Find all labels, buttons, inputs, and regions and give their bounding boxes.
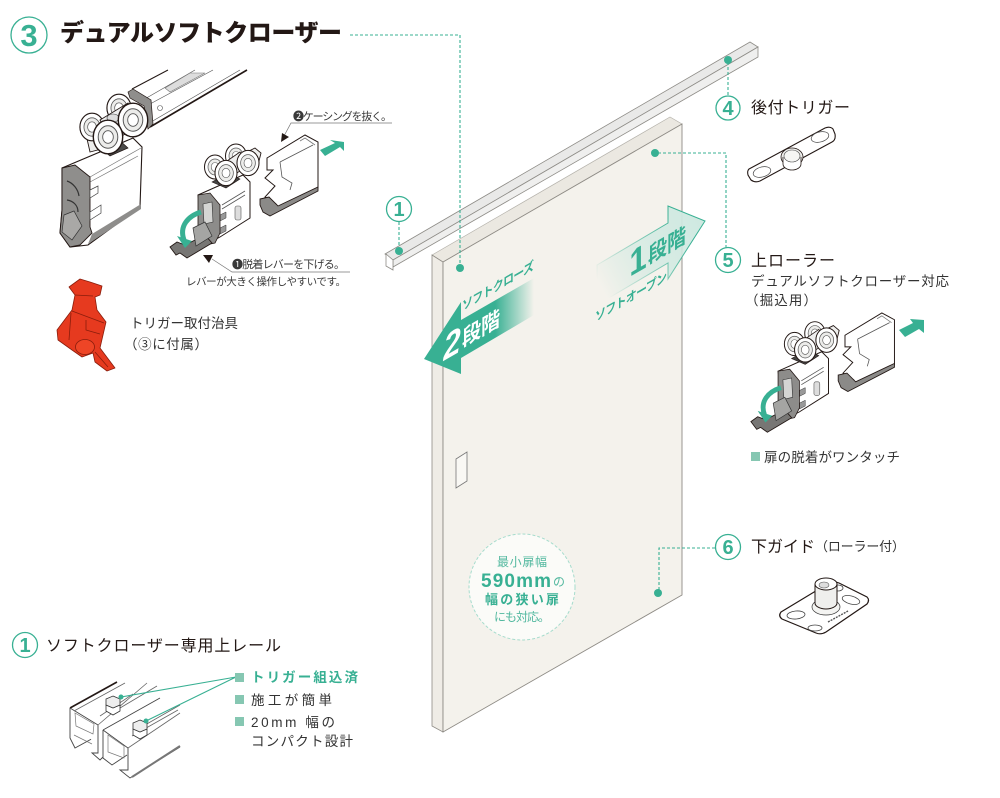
arrow: soft open 1 step: 段階 <box>648 222 686 269</box>
annotation: step 1 lower lever <box>186 255 350 288</box>
label: trigger jig <box>124 316 238 352</box>
label: trigger jig: トリガー取付治具 <box>130 316 238 331</box>
badge 6 with leader: 6 <box>722 537 734 559</box>
annotation: step 1 lower lever: レバーが大きく操作しやすいです。 <box>186 275 346 288</box>
feature list <box>235 669 358 749</box>
annotation: step 2 remove casing: ❷ケーシングを抜く。 <box>293 109 392 123</box>
callout: minimum door width: 最小扉幅 <box>497 554 547 569</box>
heading: upper roller <box>745 252 950 308</box>
label: trigger jig: （③に付属） <box>124 337 208 352</box>
arrow: soft close 2 steps: ソフトクローズ <box>462 257 534 314</box>
note: one-touch door attach: 扉の脱着がワンタッチ <box>764 449 900 465</box>
arrow: soft open 1 step: 1 <box>629 234 647 285</box>
callout: minimum door width <box>469 534 575 640</box>
leader: trigger installed pointers <box>118 677 236 724</box>
badge 1 with leader to rail <box>386 196 412 255</box>
leader: title to door <box>350 35 464 272</box>
illustration: lower guide <box>780 578 868 634</box>
callout: minimum door width: 幅の狭い扉 <box>485 592 559 607</box>
badge 1: rail section: 1 <box>19 635 31 657</box>
illustration: door <box>432 117 682 732</box>
heading: upper roller: デュアルソフトクローザー対応 <box>751 273 950 289</box>
heading: lower guide: 下ガイド <box>751 538 815 556</box>
door handle <box>456 452 467 488</box>
feature list: コンパクト設計 <box>251 734 354 749</box>
arrow: soft close 2 steps <box>424 257 534 374</box>
callout: minimum door width: 590mm <box>481 571 551 592</box>
arrow: soft close 2 steps: 段階 <box>462 305 500 352</box>
arrow: soft open 1 step <box>595 206 705 325</box>
badge 4 with leader: 4 <box>722 98 734 120</box>
illustration: rail with trigger <box>385 42 758 270</box>
badge 4 with leader <box>716 56 740 120</box>
feature list: トリガー組込済 <box>251 669 358 685</box>
heading: rear trigger: 後付トリガー <box>751 99 850 117</box>
badge 1: rail section <box>12 632 38 658</box>
heading: lower guide: （ローラー付） <box>815 539 905 554</box>
annotation: step 1 lower lever: ❶脱着レバーを下げる。 <box>232 257 345 271</box>
number badge 3: 3 <box>20 18 38 53</box>
illustration: upper rail section <box>70 682 180 778</box>
illustration: upper roller unit <box>751 313 894 432</box>
illustration: red trigger jig <box>57 279 115 371</box>
illustration: unit with lever lowered and casing removed <box>170 135 318 258</box>
annotation: step 2 remove casing <box>281 109 392 142</box>
heading: upper roller: 上ローラー <box>751 252 835 270</box>
arrow: upper roller casing pull direction <box>899 319 924 337</box>
heading: soft closer upper rail: ソフトクローザー専用上レール <box>46 637 281 655</box>
heading: upper roller: （掘込用） <box>745 293 817 308</box>
illustration: rear trigger plate <box>748 127 835 182</box>
badge 5 with leader <box>651 149 740 272</box>
feature list: 20mm 幅の <box>251 715 335 730</box>
number badge 3 <box>11 17 47 53</box>
arrow: soft open 1 step: ソフトオープン <box>595 269 667 325</box>
arrow: soft close 2 steps: 2 <box>442 318 461 370</box>
callout: minimum door width: の <box>553 575 565 589</box>
heading: lower guide <box>751 538 905 556</box>
badge 6 with leader <box>654 534 740 597</box>
illustration: dual soft closer large unit <box>60 70 247 247</box>
badge 5 with leader: 5 <box>722 250 734 272</box>
badge 1 with leader to rail: 1 <box>393 199 405 221</box>
callout: minimum door width: にも対応。 <box>494 610 550 624</box>
arrow: casing pull direction <box>320 140 344 156</box>
feature list: 施工が簡単 <box>251 693 332 708</box>
title: デュアルソフトクローザー <box>60 19 342 47</box>
